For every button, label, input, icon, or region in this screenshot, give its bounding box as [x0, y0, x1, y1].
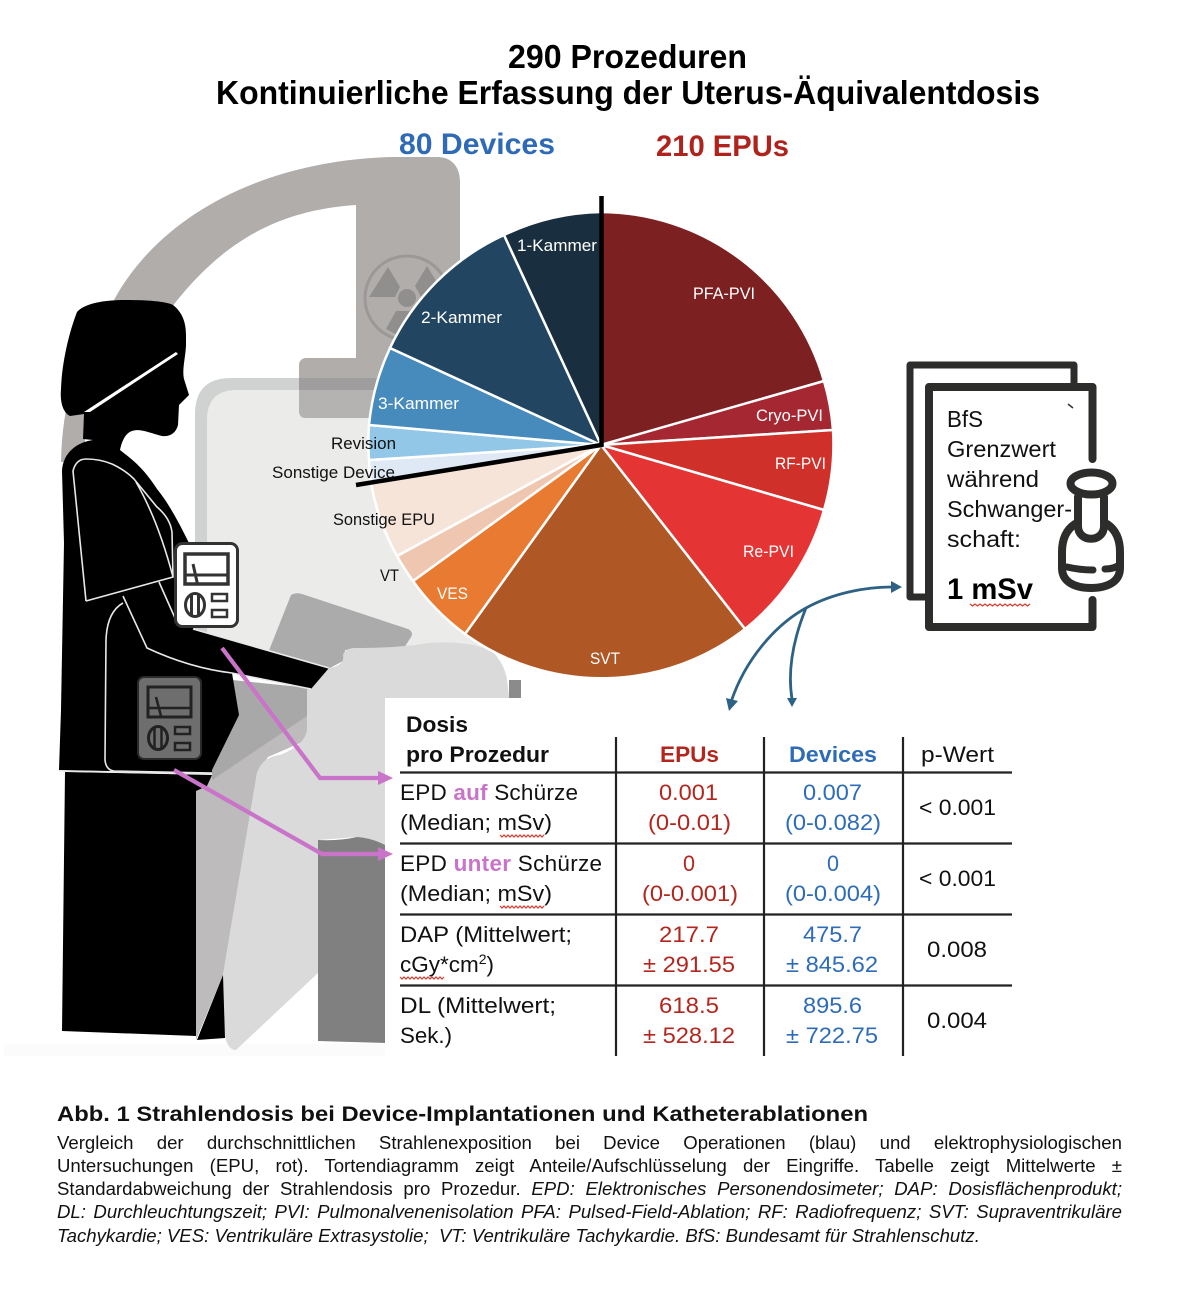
icon: flask — [1062, 472, 1120, 588]
curved blue arrows — [726, 581, 902, 711]
Device values: (0-0.004) — [785, 881, 881, 906]
person silhouette — [59, 300, 329, 1040]
EPU values: 0.001 — [659, 780, 718, 805]
table row labels: 2 — [479, 951, 487, 967]
table row labels: (Median; mSv) — [400, 810, 552, 835]
p values — [919, 795, 996, 1033]
EPU values: ± 528.12 — [643, 1023, 735, 1048]
BfS text: Grenzwert — [947, 436, 1056, 462]
divider: devices vs EPUs — [356, 196, 602, 485]
Device values: 0 — [827, 851, 839, 876]
p values: < 0.001 — [919, 866, 996, 891]
figure caption body: Standardabweichung der Strahlendosis pro Prozedur. EPD: Elektronisches Personendosimeter; DAP: Dosisflächenprodukt; — [57, 1178, 1122, 1199]
figure caption body: DL: Durchleuchtungszeit; PVI: Pulmonalvenenisolation PFA: Pulsed-Field-Ablation; RF: Radiofrequenz; SVT: Supraventrikuläre — [57, 1201, 1122, 1222]
table header: Devices — [789, 742, 877, 767]
table row labels: Sek.) — [400, 1023, 452, 1048]
p values: 0.008 — [927, 937, 987, 962]
Device values: 895.6 — [803, 993, 862, 1018]
figure caption body: Vergleich der durchschnittlichen Strahlenexposition bei Device Operationen (blau) und elektrophysiologischen — [57, 1132, 1122, 1152]
pie labels: 2-Kammer — [421, 309, 503, 327]
figure caption body: Untersuchungen (EPU, rot). Tortendiagramm zeigt Anteile/Aufschlüsselung der Eingriffe. Tabelle zeigt Mittelwerte ± — [57, 1155, 1122, 1176]
pie labels: Re-PVI — [743, 543, 794, 561]
table row labels: DAP (Mittelwert; — [400, 922, 572, 947]
table row labels: cGy*cm — [400, 952, 479, 977]
slice: Cryo-PVI — [601, 381, 833, 445]
p values: 0.004 — [927, 1008, 987, 1033]
Device values: 0.007 — [803, 780, 862, 805]
EPU values: 217.7 — [659, 922, 719, 947]
pie labels: PFA-PVI — [693, 285, 755, 303]
pie labels: RF-PVI — [775, 455, 826, 473]
table header: p-Wert — [921, 742, 995, 767]
skirt — [62, 772, 212, 1036]
pie labels: 3-Kammer — [378, 395, 460, 413]
EPU values — [642, 780, 738, 1048]
slice: 2-Kammer — [390, 235, 601, 445]
pie labels: VES — [437, 585, 468, 603]
table row labels: EPD unter Schürze — [400, 851, 602, 876]
pie labels: Sonstige EPU — [333, 511, 435, 529]
Device values: ± 722.75 — [786, 1023, 878, 1048]
title — [216, 38, 1040, 111]
pie labels: Sonstige Device — [272, 464, 395, 482]
table header — [406, 712, 995, 767]
slice: 3-Kammer — [369, 348, 601, 445]
pie labels: Revision — [331, 435, 396, 453]
icon: dosimeter under apron — [138, 677, 201, 759]
title: Kontinuierliche Erfassung der Uterus-Äquivalentdosis — [216, 74, 1040, 111]
slice: Sonstige Device — [369, 445, 601, 483]
Device values: (0-0.082) — [785, 810, 881, 835]
pie labels: 1-Kammer — [517, 237, 598, 255]
pie labels: Cryo-PVI — [756, 407, 823, 425]
table white panel — [385, 698, 1015, 1056]
p values: < 0.001 — [919, 795, 996, 820]
BfS text: schaft: — [947, 526, 1021, 552]
BfS text: Schwanger- — [947, 496, 1072, 522]
pink arrows from dosimeters to table — [174, 648, 393, 861]
figure caption body — [57, 1132, 1122, 1246]
EPU values: 0 — [683, 851, 695, 876]
slice: 1-Kammer — [504, 212, 601, 445]
table header: Dosis — [406, 712, 468, 737]
pie labels: SVT — [590, 650, 620, 668]
heading: 210 EPUs: 210 EPUs — [656, 130, 789, 163]
Device values: 475.7 — [803, 922, 862, 947]
slice: VT — [397, 445, 601, 581]
BfS text — [946, 406, 1072, 606]
pie chart — [272, 196, 833, 678]
slice: Revision — [368, 425, 601, 460]
spell-check underlines — [400, 835, 544, 979]
EPU values: (0-0.001) — [642, 881, 738, 906]
table row labels: DL (Mittelwert; — [400, 993, 556, 1018]
slice: RF-PVI — [601, 430, 833, 510]
Device values: ± 845.62 — [786, 952, 878, 977]
EPU values: 618.5 — [659, 993, 719, 1018]
background illustration: x-ray machine — [4, 157, 521, 1056]
slice: Sonstige EPU — [371, 445, 601, 556]
table row labels: ) — [487, 952, 494, 977]
EPU values: ± 291.55 — [643, 952, 735, 977]
slice: VES — [413, 445, 601, 634]
EPU values: (0-0.01) — [648, 810, 731, 835]
table row labels: EPD auf Schürze — [400, 780, 578, 805]
slice: Re-PVI — [601, 445, 824, 629]
table row labels — [400, 780, 602, 1048]
table row labels: (Median; mSv) — [400, 881, 552, 906]
table — [400, 712, 1012, 1056]
slice: PFA-PVI — [601, 212, 824, 445]
title: 290 Prozeduren — [508, 38, 747, 75]
pie labels — [272, 237, 826, 668]
BfS text: BfS — [947, 406, 983, 432]
Device values — [785, 780, 881, 1048]
pie labels: VT — [380, 567, 399, 585]
icon: dosimeter on apron — [176, 544, 238, 626]
figure caption body: Tachykardie; VES: Ventrikuläre Extrasystolie; VT: Ventrikuläre Tachykardie. BfS: Bundesamt für Strahlenschutz. — [57, 1225, 980, 1246]
heading: 80 Devices: 80 Devices — [399, 128, 555, 161]
slice: SVT — [465, 445, 745, 678]
figure caption heading: Abb. 1 Strahlendosis bei Device-Implantationen und Katheterablationen — [57, 1103, 868, 1126]
icon: radiation symbol — [365, 256, 449, 340]
BfS text: 1 mSv — [947, 573, 1033, 606]
table rules — [400, 737, 1012, 1056]
BfS text: während — [946, 466, 1039, 492]
table header: pro Prozedur — [406, 742, 549, 767]
table header: EPUs — [660, 742, 719, 767]
BfS document icon — [910, 365, 1120, 627]
